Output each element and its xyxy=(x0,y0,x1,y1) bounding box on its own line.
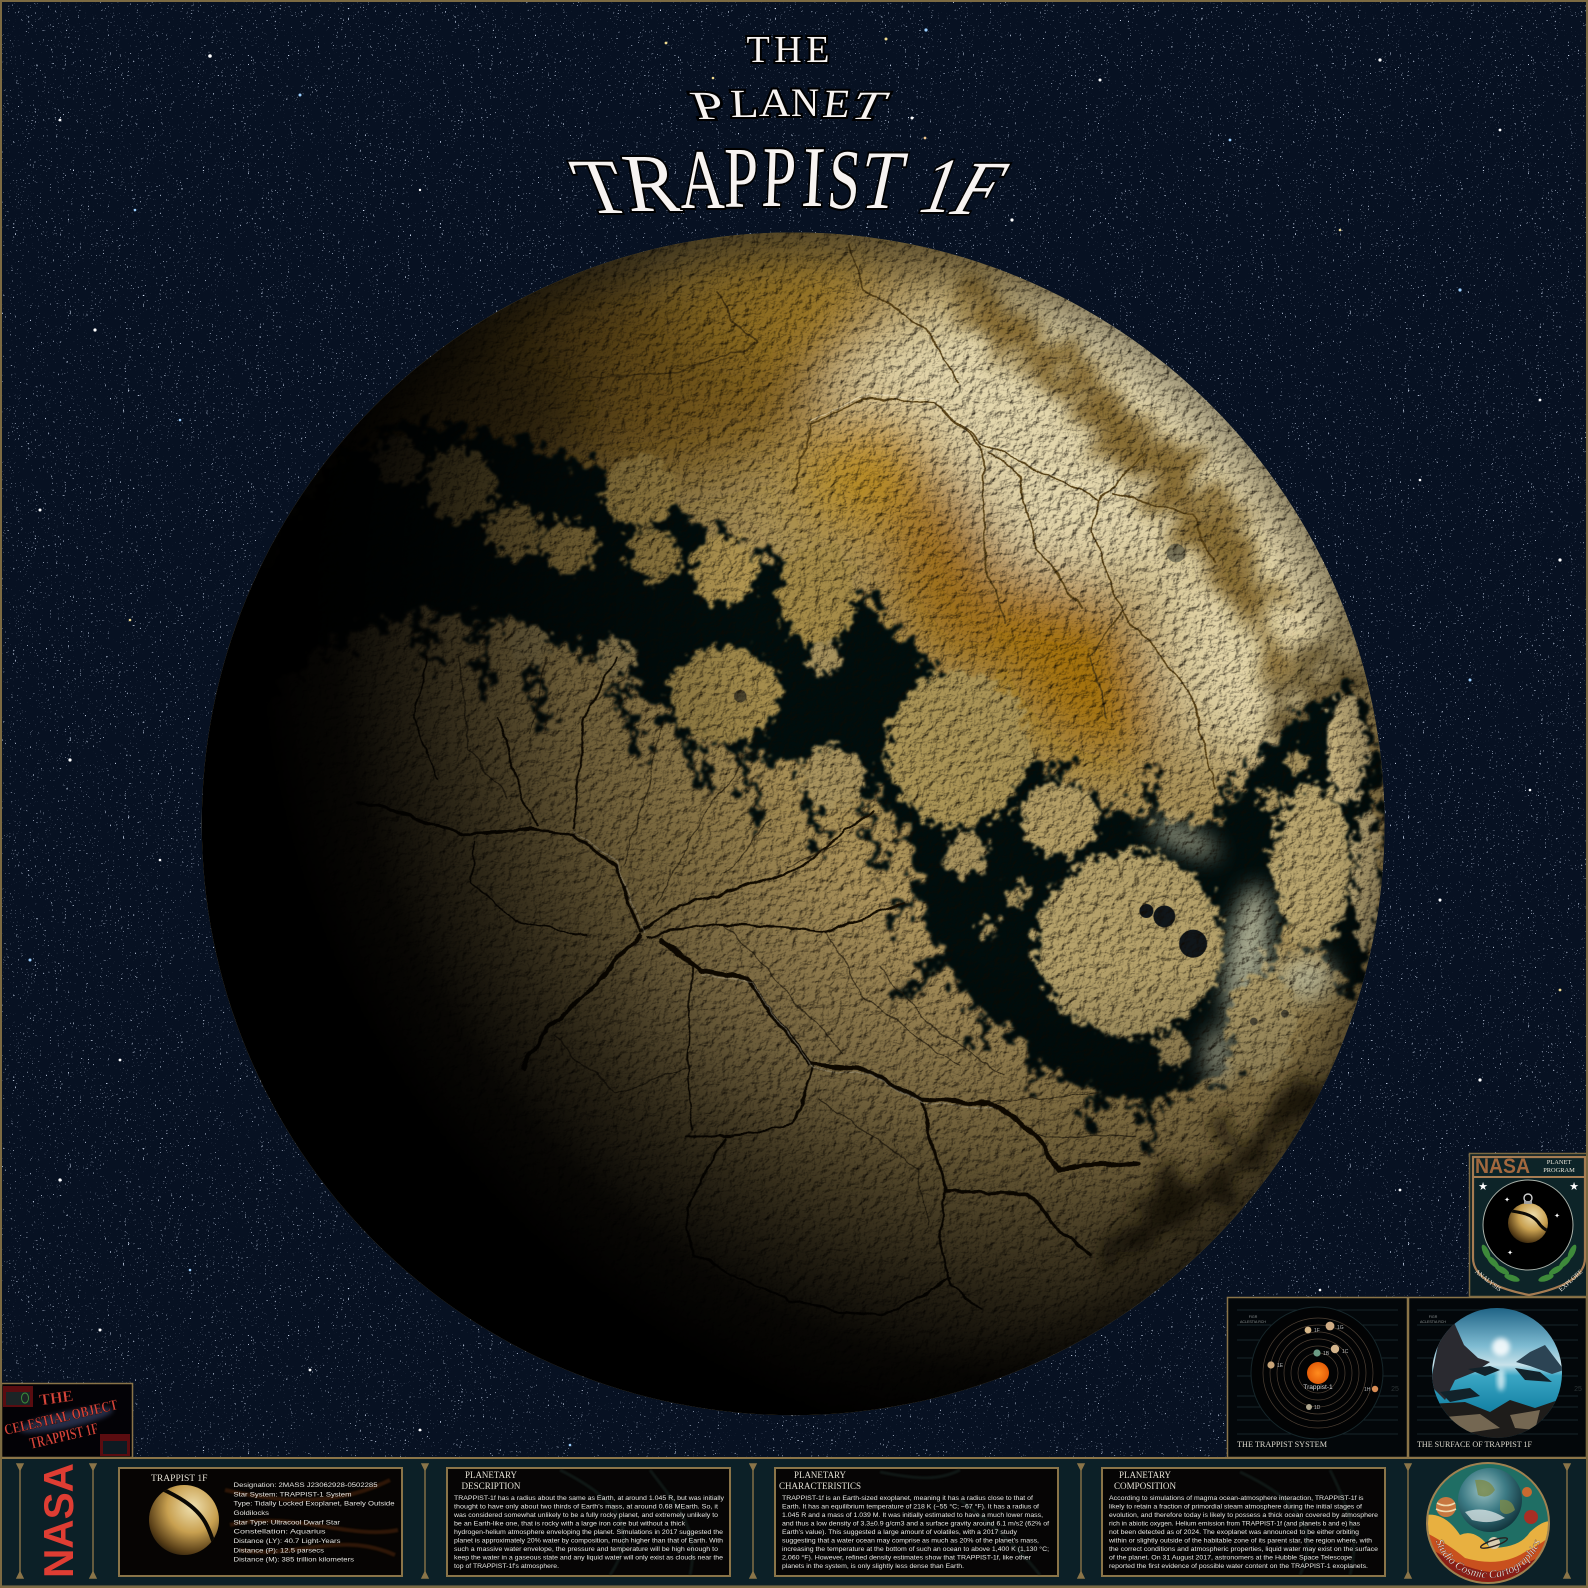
description text: was considered somewhat unlikely to be a fully rocky planet, and extremely unlikely to xyxy=(453,1512,718,1519)
composition text xyxy=(1108,1495,1378,1570)
small figure label: FIGR xyxy=(1249,1315,1258,1319)
title line: TRAPPIST 1F: R xyxy=(616,138,686,229)
badge program label: PROGRAM xyxy=(1543,1167,1575,1174)
caption: THE TRAPPIST SYSTEM xyxy=(1237,1439,1327,1449)
crack highlights xyxy=(573,395,1098,1108)
badge stars: ✦ xyxy=(1504,1196,1510,1204)
composition text: the correct conditions and atmospheric properties, liquid water may exist on the surface xyxy=(1109,1546,1378,1553)
title line: TRAPPIST 1F: S xyxy=(824,132,865,227)
data list: Goldilocks xyxy=(234,1510,270,1517)
composition text: reported the first evidence of possible water content on the TRAPPIST-1 exoplanets. xyxy=(1109,1563,1368,1570)
badge label: analysis: ANALYSIS xyxy=(1473,1268,1503,1294)
clouds xyxy=(1425,1515,1555,1588)
title line: PLANET: N xyxy=(791,81,819,125)
surface cracks xyxy=(359,243,1215,1317)
badge stars xyxy=(1478,1181,1579,1257)
islands xyxy=(375,438,1379,1078)
panel heading: PLANETARY xyxy=(1119,1470,1171,1480)
card title: THE xyxy=(38,1388,74,1409)
badge stars: ★ xyxy=(1478,1181,1488,1193)
description text: thought to have only about two thirds of Earth's mass, at around 0.68 MEarth. So, it xyxy=(454,1504,718,1510)
panel: planetary characteristics xyxy=(775,1468,1058,1576)
planets and labels xyxy=(1267,1322,1378,1411)
composition text: of the planet. On 31 August 2017, astronomers at the Hubble Space Telescope xyxy=(1109,1554,1352,1562)
panel heading xyxy=(1114,1470,1176,1491)
fine veins xyxy=(460,656,1137,1224)
small red inset: bottom right xyxy=(100,1434,130,1456)
planet surface colours xyxy=(180,220,1425,1465)
characteristics text: Earth. It has an equilibrium temperature of 218 K (−55 °C; −67 °F). It has a radius of xyxy=(782,1502,1039,1510)
title line: TRAPPIST 1F: T xyxy=(560,144,641,230)
badge wreath xyxy=(1480,1243,1578,1283)
islands along the northern band xyxy=(603,457,675,528)
title line: PLANET: L xyxy=(729,83,760,126)
characteristics text: 2,060 °F). However, refined density estimates show that TRAPPIST-1f, like other xyxy=(782,1554,1032,1562)
planets and labels: 1D xyxy=(1314,1405,1321,1411)
card title: CELESTIAL OBJECT xyxy=(3,1397,119,1439)
NASA wordmark: NASA xyxy=(35,1463,82,1578)
caption: THE SURFACE OF TRAPPIST 1F xyxy=(1417,1439,1532,1449)
composition text: not been detected as of 2024. The exoplanet was announced to be either orbiting xyxy=(1109,1529,1359,1536)
badge label: explore: EXPLORE xyxy=(1558,1268,1584,1293)
small red inset: top left xyxy=(3,1386,33,1407)
badge NASA wordmark: NASA xyxy=(1475,1155,1530,1178)
panel heading xyxy=(779,1470,861,1491)
characteristics text: suggesting that a water ocean may comprise as much as 20% of the planet's mass, xyxy=(782,1538,1039,1544)
data list xyxy=(234,1482,395,1564)
characteristics text: TRAPPIST-1f is an Earth-sized exoplanet, meaning it has a radius close to that of xyxy=(782,1495,1033,1502)
planet: Trappist 1F xyxy=(180,220,1425,1465)
data list: Star Type: Ultracool Dwarf Star xyxy=(234,1519,341,1526)
data list: Constellation: Aquarius xyxy=(234,1529,326,1536)
small figure label: ACLESTIA RCH xyxy=(1240,1320,1266,1324)
faint number: 25 xyxy=(1574,1386,1582,1393)
planets and labels: 1C xyxy=(1342,1349,1349,1355)
swirl artwork xyxy=(225,1480,398,1555)
composition text: According to simulations of magma ocean-atmosphere interaction, TRAPPIST-1f is xyxy=(1109,1495,1364,1502)
badge stars: ✦ xyxy=(1507,1249,1513,1257)
orbit diagram xyxy=(1251,1307,1383,1439)
title xyxy=(560,29,1022,231)
shield outline xyxy=(1473,1157,1585,1295)
planets and labels: 1E xyxy=(1277,1363,1284,1369)
bright glow on the dark channels xyxy=(1146,814,1335,1084)
characteristics text: increasing the temperature at the bottom of such an ocean to above 1,400 K (1,130 °C; xyxy=(782,1545,1049,1553)
description text: hydrogen-helium atmosphere enveloping the planet. Simulations in 2017 suggested the xyxy=(454,1529,723,1536)
curved studio name: Studio Cosmic Cartographics xyxy=(1436,1539,1540,1578)
panel: the surface of Trappist 1F xyxy=(1408,1298,1586,1458)
dappled brown pattern on upper right limb xyxy=(950,282,1355,757)
badge stars: ★ xyxy=(1569,1181,1579,1193)
description text: keep the water in a gaseous state and any liquid water will only exist as clouds near the xyxy=(454,1554,723,1562)
description text: planet is approximately 20% water by composition, much higher than that of Earth. With xyxy=(454,1538,723,1544)
title line: PLANET: T xyxy=(843,84,895,128)
composition text: rich in abiotic oxygen. Helium emission from TRAPPIST-1f (and planets b and e) has xyxy=(1109,1520,1361,1528)
data list: Distance (M): 385 trillion kilometers xyxy=(234,1557,355,1564)
title line: PLANET xyxy=(685,81,895,128)
small figure label xyxy=(1240,1315,1266,1324)
surface scene xyxy=(1430,1306,1564,1440)
title line: PLANET: A xyxy=(759,81,792,125)
panel: celestial object card xyxy=(2,1384,132,1458)
panel: mission badge xyxy=(1470,1154,1588,1296)
dark dapples on lower right limb xyxy=(1106,1068,1332,1263)
southern crack network xyxy=(359,656,1137,1317)
title line: TRAPPIST 1F: P xyxy=(760,130,798,226)
data list: Distance (P): 12.5 parsecs xyxy=(234,1547,325,1554)
panel heading: COMPOSITION xyxy=(1114,1481,1176,1491)
data list: Star System: TRAPPIST-1 System xyxy=(234,1491,352,1498)
panel: planetary composition xyxy=(1102,1468,1385,1576)
title line: PLANET: E xyxy=(820,82,853,126)
panel: Trappist 1F data xyxy=(119,1468,402,1576)
title line: TRAPPIST 1F: A xyxy=(677,133,726,227)
data list: Distance (LY): 40.7 Light-Years xyxy=(234,1538,341,1545)
small figure label xyxy=(1420,1315,1446,1324)
planets and labels: 1G xyxy=(1337,1325,1344,1331)
description text: be an Earth-like one, that is rocky with a large iron core but without a thick xyxy=(454,1520,686,1528)
badge stars: ✦ xyxy=(1554,1212,1560,1220)
card title xyxy=(3,1388,119,1453)
planets and labels: 1H xyxy=(1364,1387,1371,1393)
title line: TRAPPIST 1F: 1 xyxy=(908,143,973,230)
title line: TRAPPIST 1F: I xyxy=(800,129,827,225)
planets and labels: 1F xyxy=(1314,1328,1320,1334)
title line: THE: THE xyxy=(746,29,830,71)
characteristics text: and thus a low density of 3.3±0.9 g/cm3 and a surface gravity around 6.1 m/s2 (62% of xyxy=(782,1520,1049,1528)
title line: PLANET: P xyxy=(685,84,732,128)
characteristics text: 1.045 R and a mass of 1.039 M. It was initially estimated to have a much lower mass, xyxy=(782,1512,1043,1519)
galaxy image xyxy=(17,1402,115,1438)
star label: Trappist-1 xyxy=(1303,1384,1333,1391)
description text xyxy=(453,1495,725,1570)
medallion: Studio Cosmic Cartographics xyxy=(1426,1462,1550,1584)
title line: TRAPPIST 1F: F xyxy=(937,147,1022,231)
panel heading xyxy=(462,1470,521,1491)
characteristics text: planets in the system, is only slightly less dense than Earth. xyxy=(782,1563,964,1570)
panel heading: CHARACTERISTICS xyxy=(779,1481,861,1491)
badge circle xyxy=(1483,1180,1573,1270)
planets xyxy=(1436,1497,1456,1517)
star: Trappist-1 xyxy=(1307,1362,1329,1384)
composition text: likely to retain a fraction of primordial steam atmosphere during the initial stages of xyxy=(1109,1504,1362,1510)
faint number: 25 xyxy=(1391,1386,1399,1393)
fine surface texture xyxy=(350,232,1384,1354)
small figure label: ACLESTIA RCH xyxy=(1420,1320,1446,1324)
small figure label: FIGR xyxy=(1429,1315,1438,1319)
title line: TRAPPIST 1F: P xyxy=(724,131,758,227)
dark ocean channels xyxy=(203,422,1382,1146)
description text: such a massive water envelope, the pressure and temperature will be high enough to xyxy=(454,1546,718,1553)
panel heading: TRAPPIST 1F xyxy=(151,1474,208,1484)
panel heading: DESCRIPTION xyxy=(462,1481,521,1491)
badge astronaut icon xyxy=(1524,1194,1532,1204)
characteristics text xyxy=(782,1495,1049,1570)
ornamental dividers xyxy=(17,1464,1570,1578)
badge program label: PLANET xyxy=(1547,1159,1571,1166)
data list: Designation: 2MASS J23062928-0502285 xyxy=(234,1482,378,1489)
panel: planetary description xyxy=(447,1468,730,1576)
composition text: evolution, and therefore today is likely to possess a thick ocean covered by atmosphere xyxy=(1109,1512,1378,1519)
small planet image xyxy=(149,1485,219,1555)
title line: TRAPPIST 1F: T xyxy=(852,133,914,226)
panel: the Trappist system xyxy=(1228,1298,1408,1458)
composition text: within or slightly outside of the habitable zone of its parent star, the region where, with xyxy=(1108,1538,1372,1544)
planets and labels: 1B xyxy=(1323,1351,1330,1357)
characteristics text: Earth's value). This suggested a large amount of volatiles, with a 2017 study xyxy=(782,1529,1018,1536)
description text: top of TRAPPIST-1f's atmosphere. xyxy=(454,1563,559,1570)
badge program label xyxy=(1543,1159,1575,1174)
badge planet xyxy=(1506,1203,1550,1243)
card title: TRAPPIST 1F xyxy=(28,1420,100,1453)
panel heading: PLANETARY xyxy=(794,1470,846,1480)
panel heading: PLANETARY xyxy=(465,1470,517,1480)
title line: TRAPPIST 1F xyxy=(560,129,1022,231)
description text: TRAPPIST-1f has a radius about the same as Earth, at around 1.045 R, but was initially xyxy=(454,1495,725,1502)
earth xyxy=(1458,1468,1522,1532)
bottom information band xyxy=(2,1457,1586,1586)
spikes of dark into the continent xyxy=(413,609,1230,1146)
day-night shading xyxy=(180,220,1425,1465)
northern crack lines xyxy=(499,243,1215,788)
craters on large island xyxy=(734,544,1289,1025)
data list: Type: Tidally Locked Exoplanet, Barely Outside xyxy=(234,1501,395,1508)
